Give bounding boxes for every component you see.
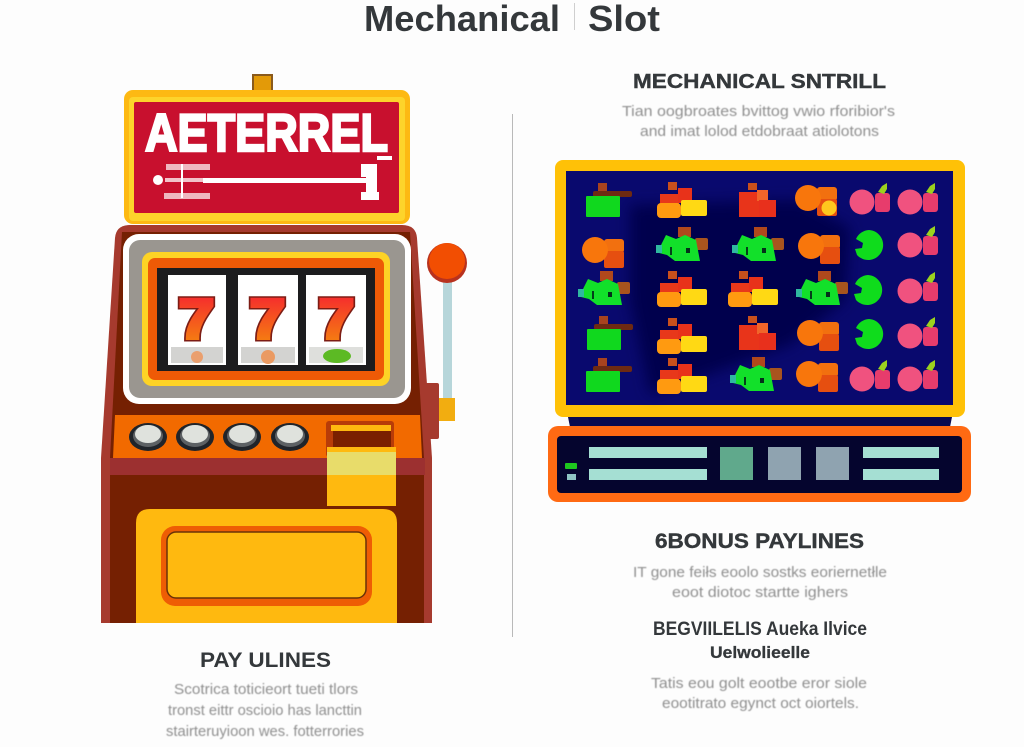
panel: video slot screen [555,160,965,417]
reel 3: 7 [319,287,354,350]
right bars [863,447,939,480]
lever [425,243,467,439]
coin slot [326,421,396,506]
screen bezel [123,234,411,404]
center divider [512,114,513,637]
lower door [136,509,397,623]
reel 2: 7 [250,287,285,350]
square buttons [720,447,849,480]
indicator lights [565,463,577,480]
left bars [589,447,707,480]
reel 3: 7 [319,287,354,350]
bonus paylines text: eoot diotoc startte ighers [672,584,848,601]
reel 1: 7 [179,287,214,350]
sign lettering: AETERREL [145,104,388,163]
pay lines text: tronst eittr oscioio has lancttin [168,702,362,719]
sign [124,90,410,224]
screen stand [568,417,952,427]
fruit row 5 [586,357,938,394]
pay lines text [166,681,364,740]
bonus paylines text: IT gone feiłs eoolo sostks eoriernetłle [633,564,887,581]
reel 2 [238,275,298,365]
secondary text: Tatis eou golt eootbe eror siole [651,675,867,692]
secondary heading [653,619,867,662]
fruit row 3 [578,271,938,307]
sign graphic [153,156,392,200]
reel 3 [306,275,366,365]
right heading: MECHANICAL SNTRILL [633,71,886,93]
fruit row 1 [586,182,938,218]
reel 1: 7 [179,287,214,350]
reel 2: 7 [250,287,285,350]
dark screen patches [630,200,850,395]
buttons [129,423,309,451]
bonus paylines text [633,564,887,601]
right intro text [622,103,895,140]
pay lines text: Scotrica toticieort tueti tlors [174,681,358,698]
top knob [253,75,272,91]
title [364,0,660,39]
reel 1 [168,275,226,365]
pay lines heading: PAY ULINES [200,649,331,672]
right intro text: Tian oogbroates bvittog vwio rforibior's [622,103,895,120]
fruit row 2 [582,226,938,268]
secondary text: eootitrato egynct oct oiortels. [662,695,859,712]
bonus paylines heading: 6BONUS PAYLINES [655,530,864,553]
control panel [110,415,425,506]
cabinet [101,225,432,623]
pay lines text: stairteruyioon wes. fotterrories [166,723,364,740]
secondary text [651,675,867,712]
panel: slot machine illustration [101,75,467,623]
right intro text: and imat lolod etdobraat atiolotons [640,123,879,140]
fruit row 4 [587,316,938,354]
panel: control console [548,426,971,502]
secondary heading: Uelwolieelle [710,643,810,662]
secondary heading: BEGVIILELIS Aueka Ilvice [653,619,867,640]
